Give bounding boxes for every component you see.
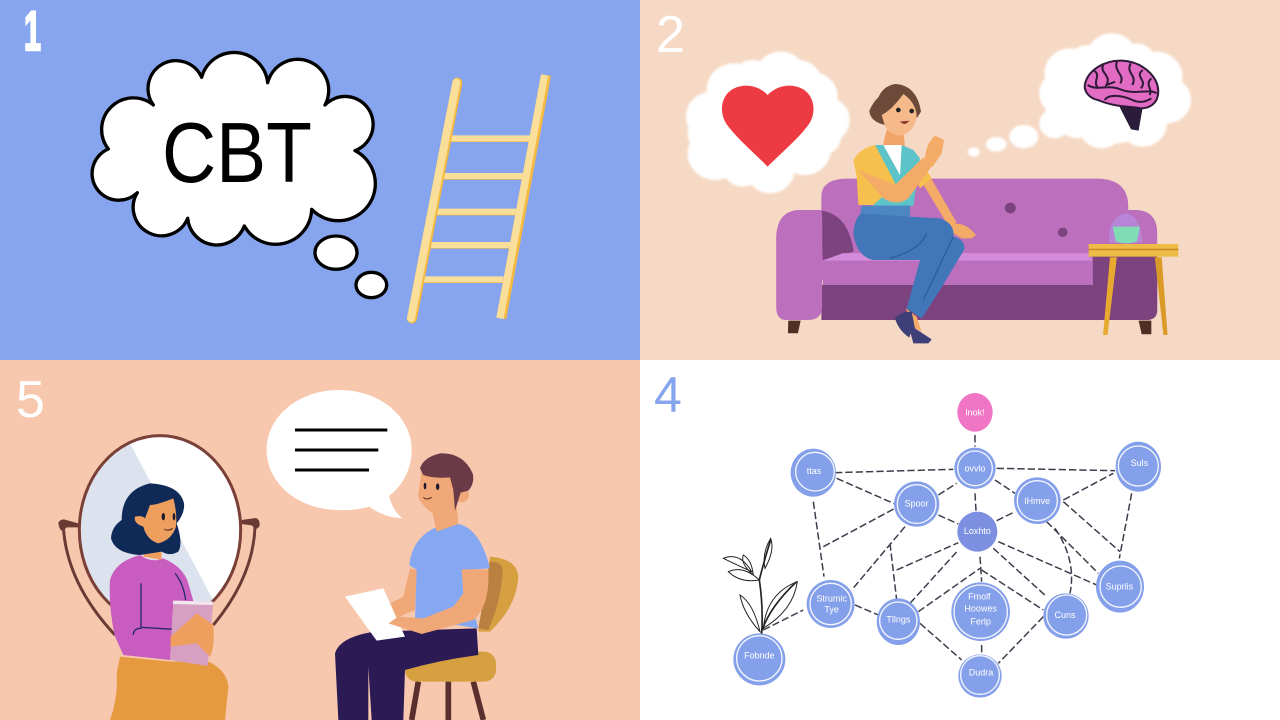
brain folds [1088,62,1157,102]
ankle [906,308,922,332]
plant stem [759,540,797,634]
table top [1089,244,1178,257]
smile [423,497,432,499]
brain body [1085,61,1158,108]
shirt [409,524,490,628]
CBT label: CBT [162,106,312,201]
neck [432,505,458,532]
node: left lower: Strumic [816,594,847,604]
node: upper left: ttas [807,466,822,476]
left rail highlight [411,83,456,318]
ladder [411,75,546,318]
neck [883,130,905,147]
node: spoor [894,481,939,527]
skirt [110,657,228,720]
waistband [860,206,910,217]
sofa leg right [1139,321,1151,334]
bubble body [267,390,412,518]
node: far right [1096,561,1144,613]
cup [1113,227,1140,243]
chair back [478,557,518,632]
node: upper right [1116,442,1161,492]
sofa leg left [788,321,801,333]
mirror knob right [242,518,260,529]
eyes [424,483,439,490]
chair seat [405,652,496,682]
panel 2: woman on sofa [640,0,1280,360]
node: large centre: Hoowes [964,604,997,614]
table leg left [1103,257,1117,335]
node: cuns: Cuns [1055,610,1076,620]
panel 3 background [0,360,640,720]
heart cloud [686,52,850,193]
thought bubble small [356,272,387,298]
smile [164,528,173,530]
node: central [957,512,997,552]
far arm [918,173,957,228]
arm and hands [171,613,214,657]
panel 3 scaled art [58,390,518,720]
eyes [896,108,914,113]
node: right centre: lHmve [1025,496,1050,506]
man on chair [335,453,518,720]
node: left lower: Tye [824,605,839,615]
ear [458,490,469,502]
mouth [900,121,909,124]
node: bottom centre [958,654,1002,698]
plant leaves [723,538,797,632]
CBT thought cloud [92,52,387,298]
node: upper centre [954,448,996,489]
network diagram [723,393,1161,698]
woman on sofa [853,84,976,343]
node: right centre [1014,477,1061,524]
face [418,472,454,512]
node: cuns [1043,593,1089,639]
panel 1: CBT thought and ladder [0,0,640,360]
node: top pink [957,393,993,432]
chair back shade [478,562,503,630]
brain cloud [1039,33,1191,148]
face [135,498,176,543]
panel 3: mirror and conversation [0,360,640,720]
node: large centre: Ferlp [970,616,991,626]
panel 4: concept network [640,360,1280,720]
table leg right [1155,257,1168,335]
left rail [412,83,457,318]
hand on knee [952,224,976,238]
side table [1089,213,1178,335]
node: far right: Suprlis [1106,581,1134,591]
node: things [877,598,920,645]
sofa [776,179,1157,334]
eyes [162,513,175,520]
plant dome [1109,213,1142,243]
woman [110,483,228,720]
thought bubbles [968,125,1038,157]
node: left lower [807,580,855,628]
right rail highlight [500,75,545,318]
node: large centre: Fmolf [968,591,991,601]
chair legs [412,682,483,720]
near arm and hand [388,569,488,634]
brain icon [1085,61,1158,131]
right rail [501,75,546,318]
hair back [869,84,921,125]
node: upper centre: ovvlo [965,464,985,474]
seat highlight [823,253,1093,261]
neck [143,552,162,560]
panel 2 background [640,0,1280,360]
table top edge [1089,249,1178,250]
tuft button 2 [1058,228,1068,237]
node: top pink: lnok! [966,407,984,417]
sofa back [821,179,1128,280]
hair [420,453,473,511]
paper [345,588,405,641]
left arm [776,210,822,320]
node: bottom left [733,633,785,685]
jeans [853,213,964,318]
raised hand [925,136,944,167]
plant [723,538,797,634]
speech bubble [267,390,412,518]
vest [873,145,920,206]
number 2: 2 [656,6,685,64]
far arm [390,568,417,620]
right arm [1108,210,1157,320]
brain stem [1119,105,1143,131]
node: things: Tllngs [886,615,911,625]
sweater [110,555,195,660]
forearm [858,157,933,202]
white shirt [883,145,902,175]
sofa base [821,253,1157,320]
node: upper left [791,449,836,497]
sleeve [853,145,896,205]
book [170,601,213,666]
jean seam [890,233,953,300]
far sleeve [915,172,932,188]
node: large centre [951,582,1010,641]
node: spoor: Spoor [905,499,929,509]
book page [173,601,213,605]
hair [111,483,184,555]
panel 1 background [0,0,640,360]
number 5: 5 [16,371,45,429]
dashed connections [763,435,1132,663]
node: bottom centre: Dudra [969,668,993,678]
mirror stand [63,527,255,635]
rungs [421,138,532,279]
mirror glass [130,437,240,622]
face [882,94,917,135]
mirror frame [79,436,241,624]
panel 2 scaled art [686,33,1191,335]
number 1: 1 [24,0,41,62]
thought bubble large [315,236,357,269]
cloud outline [92,52,375,245]
tuft button 1 [1005,203,1016,213]
sweater lines [133,573,186,635]
heart icon [722,86,814,167]
number 4: 4 [654,367,682,423]
mirror knob left [58,519,78,531]
rung shadows [421,141,532,282]
node: upper right: Suls [1131,458,1149,468]
seat cushion [823,253,1093,285]
shoe [895,312,932,343]
trousers [335,628,478,720]
panel 4 background [640,360,1280,720]
mirror reflection wedge [80,444,212,602]
left arm shadow [820,211,854,260]
node: central: Loxhto [964,526,991,536]
text lines [295,430,387,470]
node: bottom left: Fobnde [744,651,775,661]
